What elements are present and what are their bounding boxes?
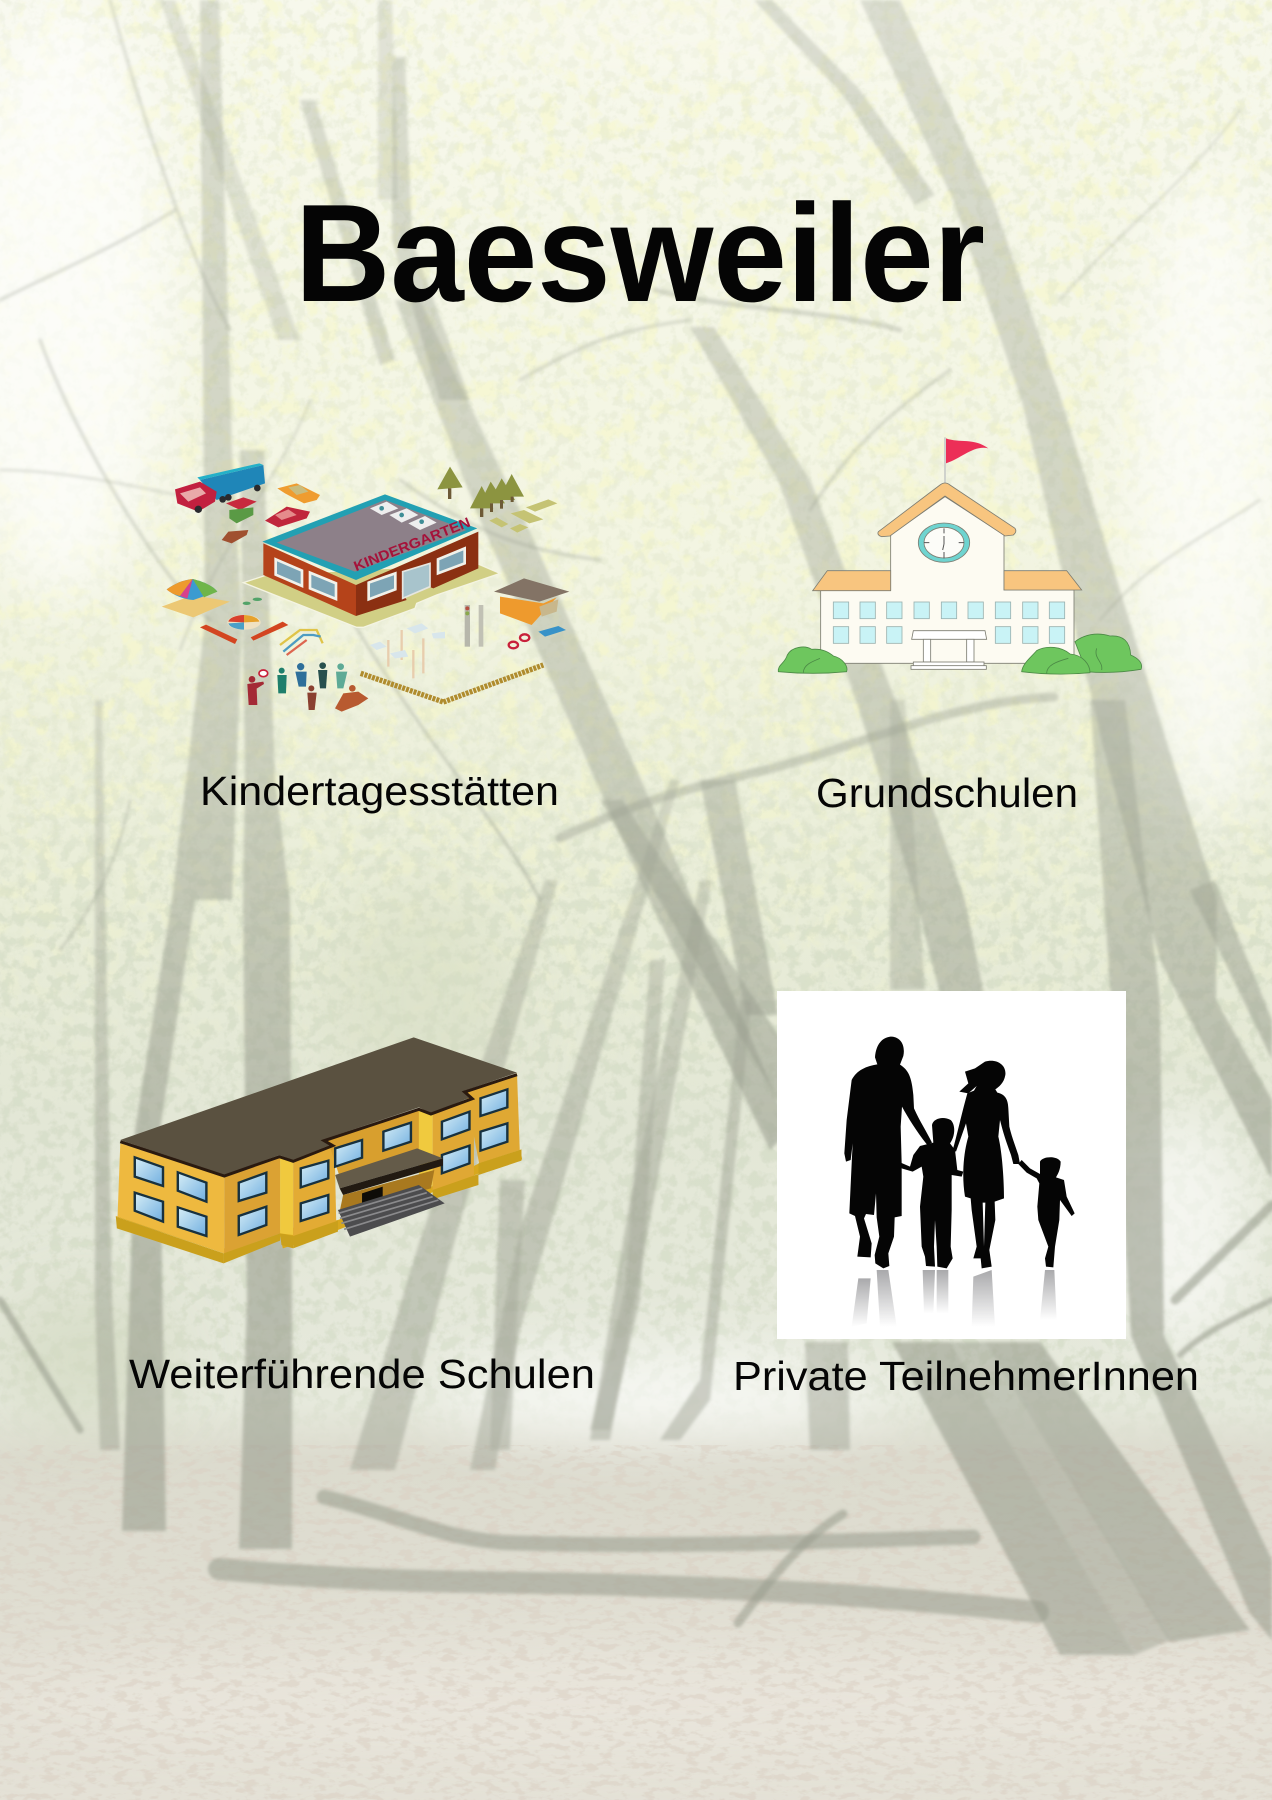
icon: family silhouette <box>844 1037 1075 1327</box>
label: Private TeilnehmerInnen: Private TeilnehmerInnen <box>733 1353 1199 1399</box>
shelter <box>500 597 557 625</box>
panel: Private TeilnehmerInnen <box>733 991 1199 1399</box>
label: Kindertagesstätten: Kindertagesstätten <box>200 768 559 814</box>
icon: primary school <box>778 437 1142 674</box>
leaning trunks <box>892 1342 1135 1655</box>
boy <box>901 1118 963 1268</box>
fence <box>361 665 543 702</box>
cars <box>277 483 320 503</box>
title: Baesweiler <box>295 176 985 331</box>
white photo card <box>777 991 1126 1339</box>
icon: kindergarten scene <box>162 463 569 712</box>
far trunks, branches <box>95 0 925 1470</box>
panel: Kindertagesstätten <box>162 463 569 814</box>
leg gap <box>983 1203 985 1247</box>
label: Grundschulen: Grundschulen <box>816 770 1078 816</box>
children <box>247 662 368 712</box>
trees <box>437 467 524 508</box>
left trunks <box>122 0 242 1531</box>
truck <box>200 465 265 500</box>
playground <box>200 625 237 644</box>
label: Weiterführende Schulen: Weiterführende Schulen <box>129 1351 595 1397</box>
central diagonal <box>392 57 470 400</box>
panel: Grundschulen <box>778 437 1142 816</box>
faded crossing poles <box>388 630 423 678</box>
centre right diagonal <box>690 327 1015 1150</box>
man <box>844 1037 932 1268</box>
kiosk and scooter <box>226 497 257 510</box>
panel: Weiterführende Schulen <box>116 1037 595 1397</box>
icon: secondary school building <box>116 1037 522 1263</box>
woman <box>953 1061 1020 1268</box>
icon: kindergarten scene: KINDERGARTEN <box>351 514 472 574</box>
girl <box>1018 1157 1075 1267</box>
sandbox and umbrella <box>162 595 230 617</box>
big right trunk <box>860 0 1272 1180</box>
